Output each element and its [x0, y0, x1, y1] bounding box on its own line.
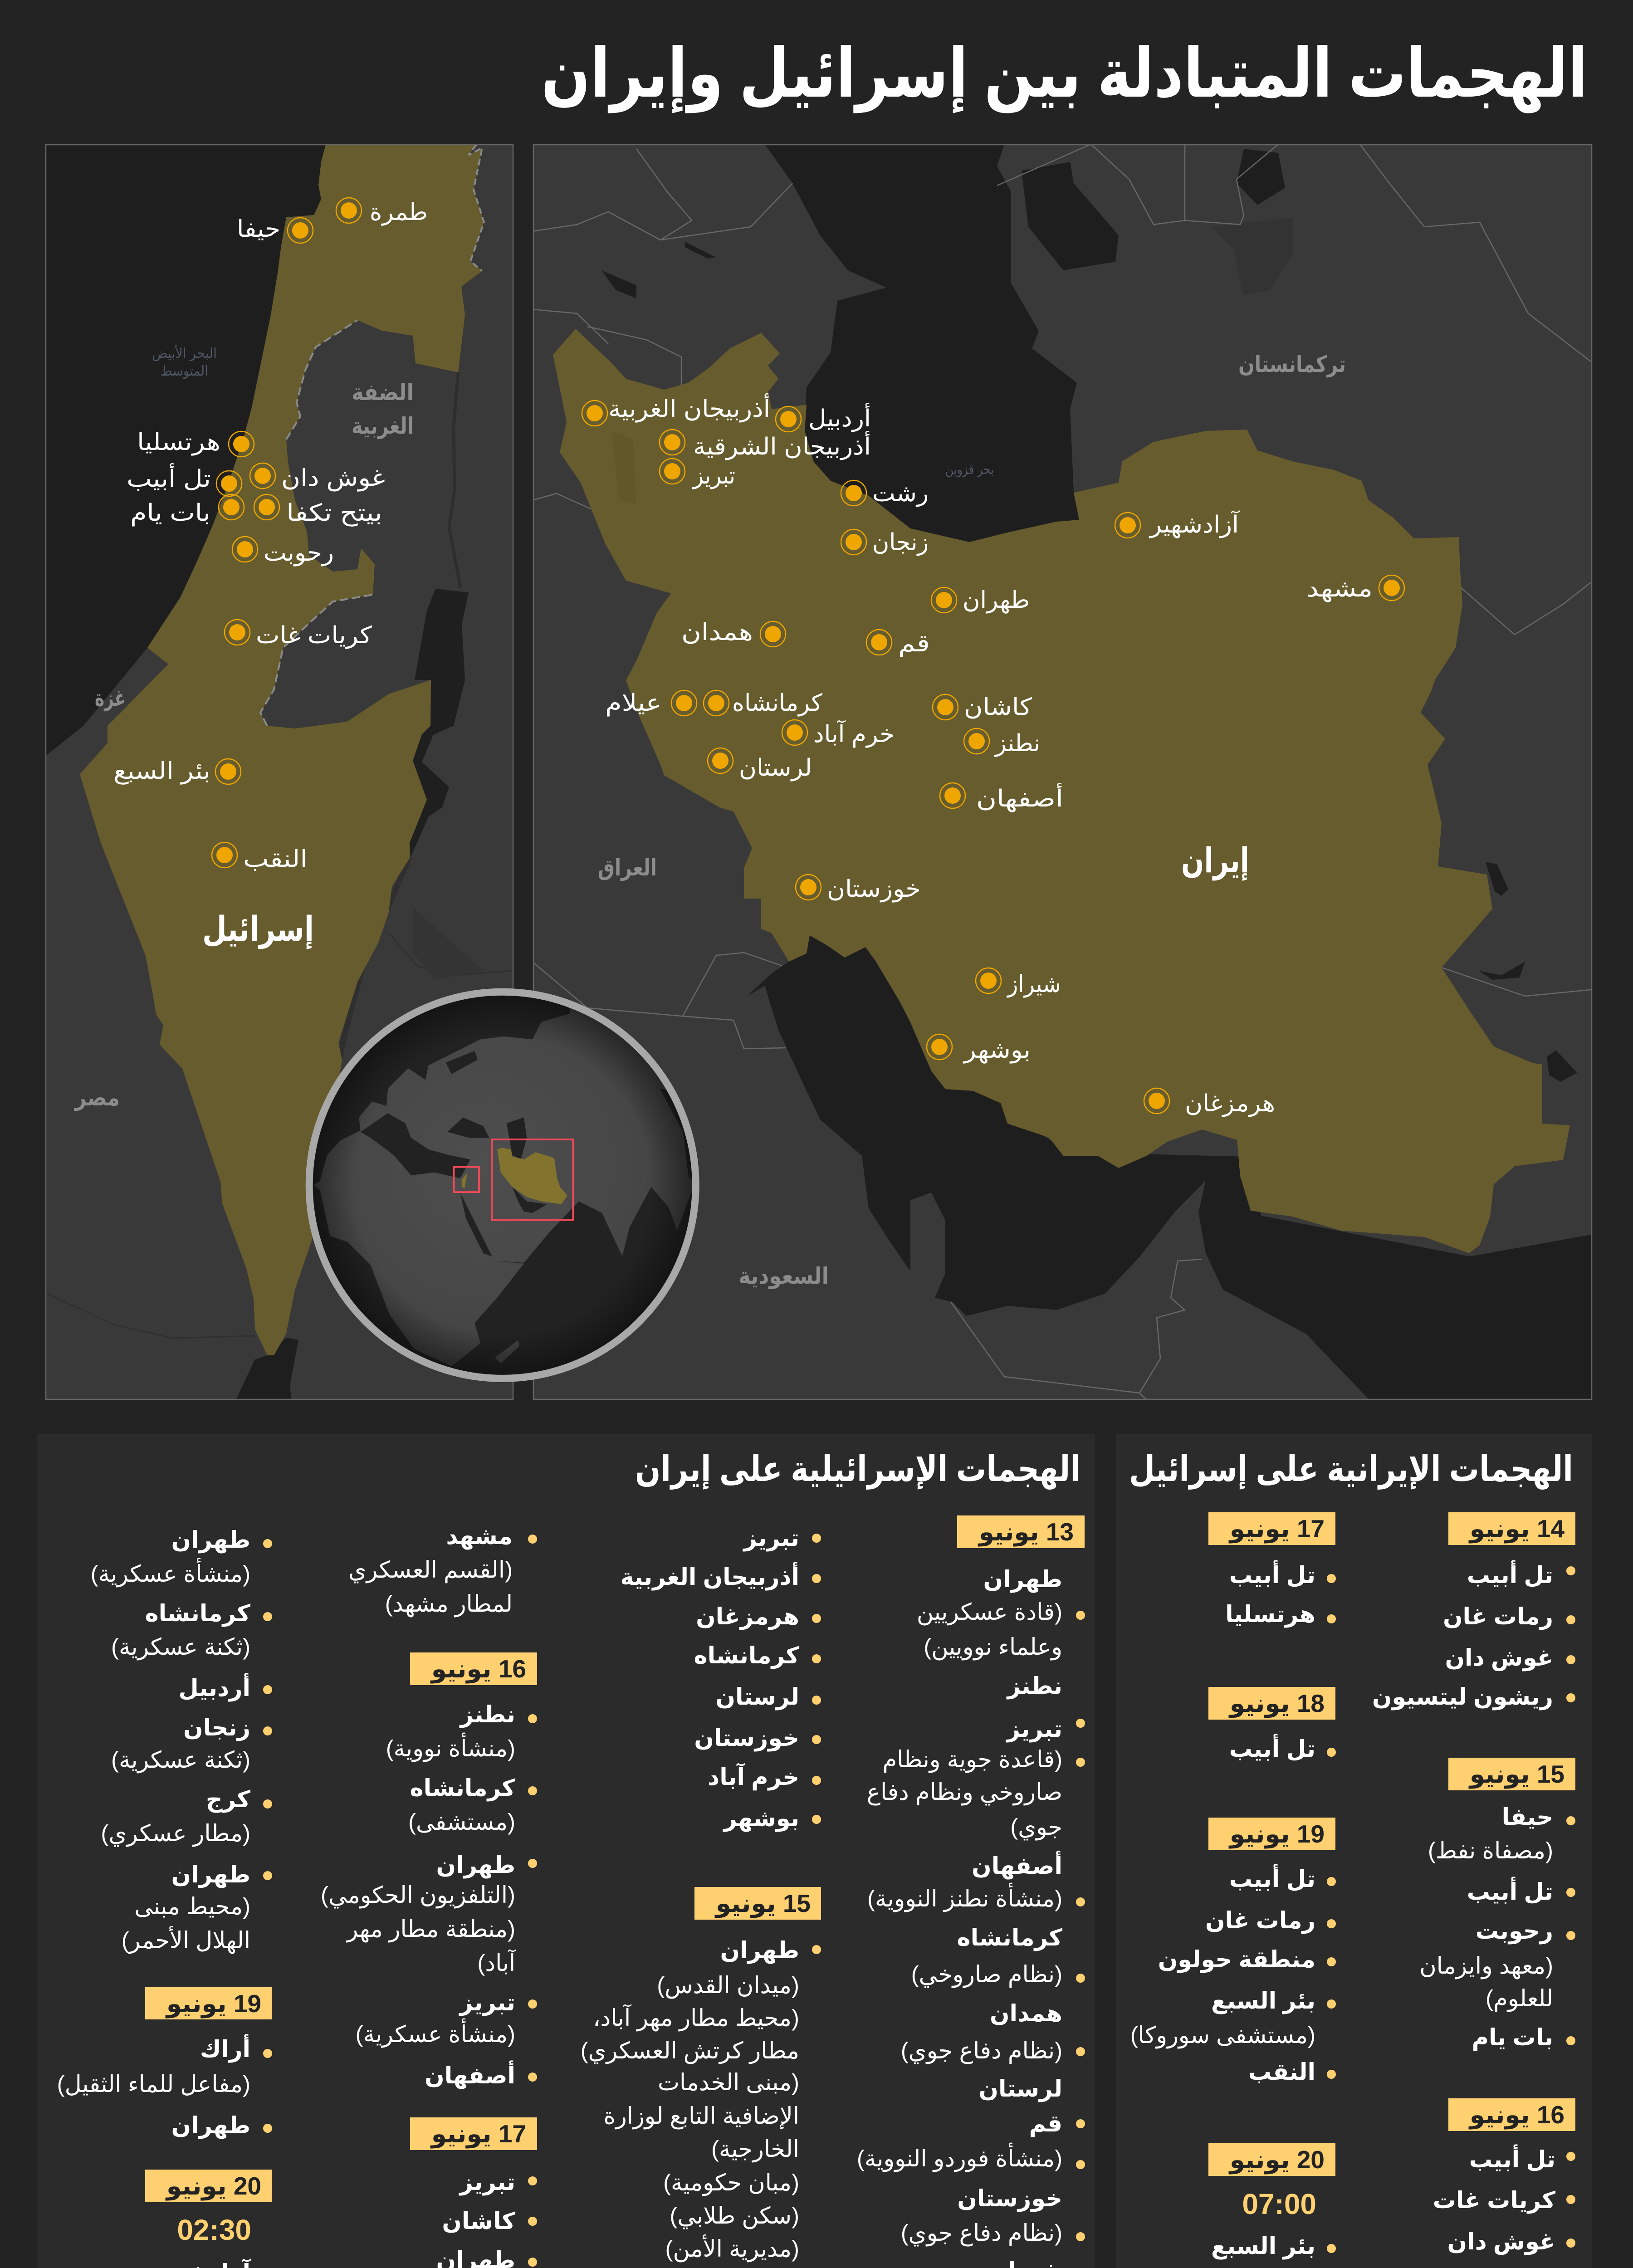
day: 19 June	[57, 1987, 272, 2139]
day: 19 June: طهران	[171, 2112, 250, 2139]
city marker: تبريز	[660, 459, 735, 489]
day: 13 June: همدان	[990, 2000, 1062, 2026]
day: 16 June	[1433, 2098, 1575, 2268]
day: 20 June	[93, 2170, 272, 2268]
city marker: قم	[866, 630, 930, 657]
map labels: surrounding countries	[598, 352, 1346, 1290]
city marker: رشت: رشت	[872, 480, 929, 507]
city marker: خوزستان	[796, 875, 921, 903]
day: 15 June: 15 يونيو	[1468, 1760, 1565, 1789]
day: 15 June: بات يام	[1472, 2024, 1553, 2051]
day: 19 June: رمات غان	[1205, 1907, 1315, 1934]
city marker: كريات غات	[225, 620, 372, 649]
city marker: حيفا	[237, 216, 313, 243]
day: 15 June: طهران	[720, 1937, 799, 1964]
day: 17 June: 17 يونيو	[430, 2120, 526, 2149]
day: 16 June: (منشأة عسكرية)	[356, 2018, 515, 2048]
map labels: surrounding areas: الغربية	[352, 413, 414, 440]
day: 15 June: (ميدان القدس)	[657, 1972, 799, 1999]
day: 13 June	[857, 1515, 1085, 2268]
list: 14 June continued: لرستان	[715, 1684, 799, 1711]
country label: إسرائيل: إسرائيل	[202, 910, 314, 949]
map labels: surrounding areas	[73, 344, 414, 1111]
day: 15 June: 15 يونيو	[714, 1889, 811, 1918]
map labels: surrounding areas: غزة	[95, 685, 126, 712]
day: 13 June: لرستان	[978, 2076, 1062, 2102]
list: 18 June continued: (مطار عسكري)	[101, 1820, 250, 1847]
day: 15 June: (محيط مطار مهر آباد،	[593, 2004, 799, 2032]
Kara-Bogaz and lakes	[601, 149, 1577, 1082]
day: 17 June	[319, 2117, 537, 2268]
day: 19 June: أراك	[200, 2034, 250, 2063]
city marker: كريات غات: كريات غات	[256, 622, 372, 649]
day: 18 June	[1208, 1687, 1336, 1762]
map labels: surrounding areas: مصر	[73, 1085, 120, 1111]
day: 16 June	[321, 1652, 537, 2089]
city marker: أذربيجان الشرقية	[660, 430, 871, 460]
day: 16 June: (منشأة نووية)	[386, 1732, 515, 1762]
map labels: surrounding areas: البحر الأبيض	[152, 344, 217, 361]
day: 16 June: غوش دان	[1447, 2229, 1555, 2255]
day: 13 June: (قادة عسكريين	[917, 1599, 1062, 1626]
city marker: زنجان: زنجان	[872, 529, 929, 556]
country borders	[532, 144, 1591, 1400]
day: 15 June: رحوبت	[1476, 1918, 1553, 1945]
day: 15 June: (مبنى الخدمات	[658, 2069, 799, 2095]
city marker: هرمزغان	[1144, 1088, 1275, 1117]
day: 19 June: 19 يونيو	[1228, 1820, 1325, 1849]
city marker: غوش دان: غوش دان	[281, 465, 385, 492]
day: 15 June: حيفا	[1502, 1804, 1553, 1830]
day: 15 June: تل أبيب	[1467, 1877, 1553, 1905]
list: 14 June continued: خرم آباد	[708, 1763, 799, 1791]
city marker: طهران: طهران	[963, 587, 1030, 614]
list: 15 June continued: لمطار مشهد)	[385, 1591, 513, 1618]
city marker: نطنز: نطنز	[994, 730, 1040, 757]
map labels: surrounding countries: تركمانستان	[1238, 352, 1346, 378]
city marker: تل أبيب: تل أبيب	[127, 463, 211, 492]
day: 13 June: جوي)	[1010, 1814, 1062, 1841]
Israel territory	[80, 145, 484, 1355]
city marker: النقب	[212, 842, 308, 872]
city marker: زنجان	[841, 529, 929, 556]
day: 16 June: آباد)	[477, 1949, 517, 1976]
day: 14 June: 14 يونيو	[1468, 1515, 1565, 1544]
list: 15 June continued: (القسم العسكري	[348, 1557, 513, 1584]
day: 13 June: وعلماء نوويين)	[924, 1634, 1062, 1661]
Iran territory	[553, 329, 1570, 1253]
day: 16 June: كرمانشاه	[410, 1775, 515, 1802]
day: 19 June: تل أبيب	[1229, 1864, 1315, 1892]
Persian Gulf and Gulf of Oman	[747, 925, 1591, 1399]
city marker: أذربيجان الغربية	[582, 393, 770, 426]
day: 19 June: النقب	[1248, 2059, 1315, 2085]
day: 16 June: تل أبيب	[1469, 2144, 1555, 2172]
day: 19 June: منطقة حولون	[1158, 1946, 1315, 1973]
day: 17 June	[1208, 1512, 1336, 1628]
day: 16 June: نطنز	[459, 1701, 515, 1728]
list: 14 June continued: أذربيجان الغربية	[620, 1562, 799, 1591]
list: 18 June continued: كرمانشاه	[145, 1600, 250, 1627]
city marker: أذربيجان الغربية: أذربيجان الغربية	[608, 393, 770, 423]
city marker: أردبيل: أردبيل	[808, 403, 871, 432]
day: 13 June: تبريز	[1005, 1716, 1062, 1743]
city marker: همدان	[681, 619, 786, 647]
day: 14 June: رمات غان	[1443, 1603, 1553, 1630]
Caspian Sea	[765, 144, 1079, 542]
day: 18 June: تل أبيب	[1229, 1734, 1315, 1762]
list: 14 June continued: كرمانشاه	[694, 1642, 799, 1669]
city marker: أصفهان	[940, 783, 1063, 812]
city marker: بات يام	[130, 494, 244, 526]
city marker: بيتح تكفا: بيتح تكفا	[286, 500, 382, 527]
list: 18 June continued: زنجان	[183, 1715, 250, 1741]
city marker: هرتسليا: هرتسليا	[137, 429, 220, 456]
day: 15 June: الخارجية)	[711, 2136, 799, 2162]
city marker: حيفا: حيفا	[237, 216, 280, 242]
West Bank dashed border	[260, 595, 373, 726]
city marker: كاشان: كاشان	[964, 694, 1032, 720]
day: 17 June: كاشان	[442, 2208, 515, 2234]
day: 19 June: (مستشفى سوروكا)	[1130, 2022, 1315, 2049]
city marker: كرمانشاه: كرمانشاه	[732, 690, 822, 717]
day: 13 June: (منشأة نطنز النووية)	[867, 1882, 1062, 1912]
day: 19 June: بئر السبع	[1211, 1988, 1315, 2014]
list: 14 June continued: بوشهر	[722, 1805, 799, 1832]
city marker: عيلام	[605, 690, 697, 716]
list: 18 June continued: الهلال الأحمر)	[122, 1926, 250, 1954]
Iran map frame	[533, 145, 1592, 1399]
panel: Iranian attacks on Israel	[1116, 1434, 1592, 2268]
list: 18 June continued: (ثكنة عسكرية)	[111, 1747, 250, 1774]
day: 15 June: (معهد وايزمان	[1419, 1953, 1553, 1980]
city marker: رحوبت	[232, 537, 334, 567]
day: 15 June: الإضافية التابع لوزارة	[603, 2103, 799, 2130]
day: 16 June: طهران	[436, 1852, 515, 1879]
list: 18 June continued	[91, 1527, 272, 1954]
city marker: عيلام: عيلام	[605, 690, 662, 716]
day: 20 June: 20 يونيو	[165, 2172, 261, 2201]
day: 16 June: (التلفزيون الحكومي)	[321, 1882, 515, 1909]
day: 20 June	[1208, 2143, 1336, 2268]
day: 14 June: تل أبيب	[1467, 1560, 1553, 1588]
city marker: تل أبيب	[127, 463, 242, 496]
city marker: آزادشهير	[1115, 510, 1240, 538]
day: 15 June	[581, 1887, 821, 2268]
day: 13 June: (نظام دفاع جوي)	[901, 2038, 1062, 2064]
day: 19 June: (مفاعل للماء الثقيل)	[57, 2071, 250, 2097]
day: 19 June	[1130, 1818, 1336, 2085]
sea: Mediterranean	[45, 144, 326, 756]
city marker: أصفهان: أصفهان	[976, 783, 1063, 812]
city marker: آزادشهير: آزادشهير	[1149, 510, 1240, 538]
map labels: surrounding countries: العراق	[598, 855, 657, 881]
list: 18 June continued: (منشأة عسكرية)	[91, 1558, 250, 1588]
panel: Israeli attacks on Iran	[37, 1434, 1095, 2268]
list: 18 June continued: طهران	[171, 1862, 250, 1888]
day: 13 June: 13 يونيو	[978, 1518, 1074, 1547]
Gulf of Aqaba	[236, 1338, 298, 1400]
city marker: غوش دان	[250, 463, 385, 492]
city marker: أذربيجان الشرقية: أذربيجان الشرقية	[693, 431, 871, 460]
list: 14 June continued: تبريز	[742, 1525, 799, 1552]
city marker: خرم آباد	[782, 719, 895, 748]
panel: Iran map	[532, 144, 1592, 1400]
day: 16 June: أصفهان	[425, 2060, 515, 2089]
day: 17 June: 17 يونيو	[1228, 1515, 1325, 1544]
day: 13 June: (منشأة فوردو النووية)	[857, 2142, 1062, 2172]
city marker: كاشان	[933, 694, 1032, 720]
city marker: بوشهر: بوشهر	[963, 1037, 1031, 1064]
day: 16 June: تبريز	[458, 1989, 515, 2016]
globe locator	[301, 982, 706, 1387]
day: 16 June: (منطقة مطار مهر	[346, 1916, 515, 1943]
list: 15 June continued: مشهد	[446, 1523, 513, 1550]
day: 13 June: قم	[1029, 2111, 1062, 2137]
list: 14 June continued	[620, 1525, 821, 1832]
city marker: شيراز: شيراز	[1006, 971, 1061, 998]
list: 14 June continued: خوزستان	[694, 1725, 799, 1752]
day: 20 June: 07:00	[1242, 2188, 1316, 2220]
city marker: خوزستان: خوزستان	[827, 876, 921, 903]
day: 15 June: مطار كرتش العسكري)	[581, 2038, 799, 2064]
city marker: النقب: النقب	[243, 846, 308, 872]
day: 14 June: غوش دان	[1445, 1645, 1553, 1672]
day: 13 June: (نظام صاروخي)	[911, 1961, 1062, 1988]
map labels: surrounding areas: المتوسط	[161, 364, 208, 379]
city marker: قم: قم	[898, 631, 930, 657]
map labels: surrounding countries: بحر قزوين	[945, 462, 994, 478]
city marker: لرستان: لرستان	[739, 755, 812, 782]
list: 18 June continued: طهران	[171, 1527, 250, 1554]
day: 19 June: 19 يونيو	[165, 1989, 261, 2019]
day: 13 June: طهران	[983, 1566, 1062, 1593]
list: 14 June continued: هرمزغان	[696, 1603, 799, 1630]
day: 20 June: 02:30	[177, 2214, 251, 2246]
list: 15 June continued	[348, 1523, 537, 1618]
heading: Israeli attacks: الهجمات الإسرائيلية على إيران	[635, 1449, 1081, 1490]
Dead Sea	[410, 589, 469, 857]
day: 13 June: (نظام دفاع جوي)	[901, 2220, 1062, 2247]
city marker: هرمزغان: هرمزغان	[1185, 1090, 1275, 1117]
Israel map frame	[46, 145, 513, 1399]
day: 17 June: تبريز	[458, 2169, 515, 2196]
day: 13 June: (قاعدة جوية ونظام	[883, 1746, 1062, 1773]
day: 13 June: نطنز	[1006, 1673, 1062, 1700]
city marker: هرتسليا	[137, 429, 254, 457]
day: 16 June: 16 يونيو	[430, 1655, 526, 1684]
city marker: طهران	[931, 587, 1030, 614]
day: 15 June: (مبان حكومية)	[663, 2170, 799, 2196]
city marker: رحوبت: رحوبت	[264, 540, 334, 567]
city marker: بئر السبع	[113, 758, 241, 785]
day: 15 June: (مصفاة نفط)	[1428, 1838, 1553, 1863]
day: 13 June: صاروخي ونظام دفاع	[867, 1779, 1062, 1806]
map labels: surrounding countries: السعودية	[738, 1263, 829, 1290]
day: 13 June: كرمانشاه	[957, 1925, 1062, 1951]
day: 16 June: (مستشفى)	[408, 1809, 515, 1835]
country label: إيران: إيران	[1181, 841, 1249, 881]
list: 18 June continued: كرج	[206, 1786, 250, 1813]
city marker: بيتح تكفا	[254, 494, 382, 527]
day: 15 June: للعلوم)	[1486, 1985, 1553, 2012]
day: 13 June: أصفهان	[972, 1851, 1062, 1880]
city marker: تبريز: تبريز	[692, 463, 735, 489]
city marker: همدان: همدان	[681, 619, 753, 645]
list: 18 June continued: أردبيل	[178, 1673, 250, 1701]
day: 15 June: (مديرية الأمن)	[665, 2234, 799, 2263]
day: 17 June: تل أبيب	[1229, 1560, 1315, 1588]
day: 17 June: هرتسليا	[1225, 1601, 1315, 1628]
map labels: surrounding areas: الضفة	[352, 380, 414, 405]
list: 18 June continued: (محيط مبنى	[134, 1893, 250, 1919]
list: 18 June continued: (ثكنة عسكرية)	[111, 1634, 250, 1661]
day: 14 June	[1372, 1512, 1575, 1711]
day: 18 June: 18 يونيو	[1228, 1689, 1325, 1718]
city marker: رشت	[841, 480, 929, 507]
day: 20 June: 20 يونيو	[1228, 2146, 1325, 2175]
city marker: لرستان	[708, 748, 812, 782]
day: 15 June: (سكن طلابي)	[670, 2203, 799, 2229]
panel: Israel map	[45, 144, 513, 1400]
city marker: مشهد: مشهد	[1306, 576, 1373, 602]
day: 20 June: بئر السبع	[1211, 2233, 1315, 2260]
city marker: نطنز	[964, 728, 1040, 757]
city marker: طمرة	[336, 198, 428, 226]
city marker: شيراز	[976, 968, 1061, 998]
city marker: خرم آباد: خرم آباد	[813, 719, 895, 748]
city marker: أردبيل	[776, 403, 871, 432]
day: 16 June: كريات غات	[1433, 2187, 1555, 2214]
city marker: بوشهر	[927, 1034, 1031, 1064]
day: 13 June: خوزستان	[957, 2185, 1062, 2212]
city marker: مشهد	[1306, 575, 1404, 602]
city marker: طمرة: طمرة	[370, 199, 428, 226]
city marker: بات يام: بات يام	[130, 500, 210, 526]
city marker: بئر السبع: بئر السبع	[113, 758, 210, 785]
day: 15 June	[1419, 1758, 1575, 2051]
day: 16 June: 16 يونيو	[1468, 2101, 1565, 2130]
day: 14 June: ريشون ليتسيون	[1372, 1684, 1553, 1711]
